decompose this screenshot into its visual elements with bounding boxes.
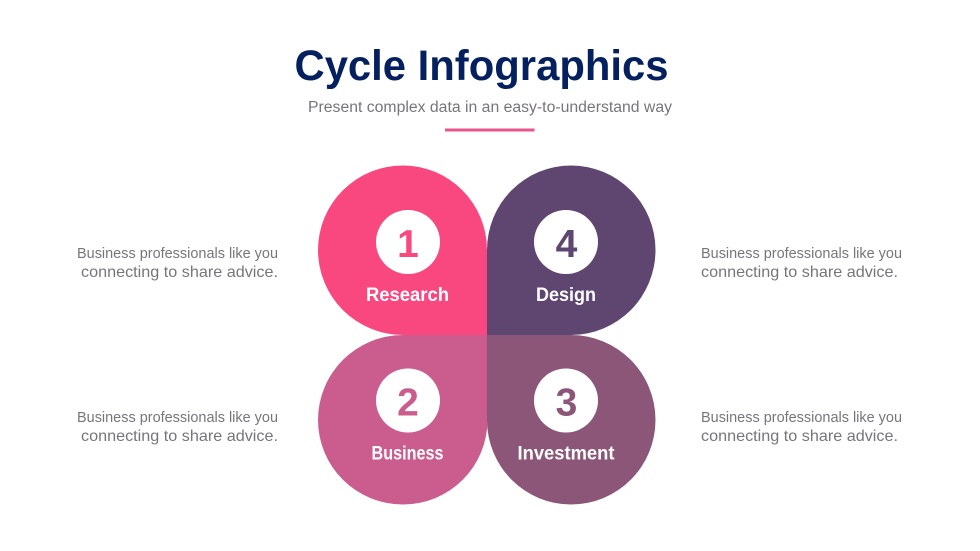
text block: bottom left: Business professionals like you bbox=[77, 409, 278, 426]
label investment: Investment bbox=[518, 444, 615, 464]
label design: Design bbox=[536, 285, 596, 306]
text block: bottom right: connecting to share advice. bbox=[701, 428, 898, 445]
badge 2 bbox=[376, 368, 440, 432]
label business: Business bbox=[372, 444, 444, 464]
text block: bottom left bbox=[77, 409, 278, 445]
text block: bottom left: connecting to share advice. bbox=[81, 428, 278, 445]
badge 3 bbox=[534, 368, 598, 432]
petal 2 bbox=[318, 335, 488, 504]
petal 1 bbox=[318, 166, 487, 335]
number 4: 4 bbox=[556, 223, 578, 266]
text block: bottom right bbox=[701, 409, 902, 445]
petal 4 bbox=[487, 166, 656, 335]
label research: Research bbox=[366, 285, 449, 306]
text block: top right bbox=[701, 245, 902, 281]
panel: step 2 business bbox=[318, 335, 488, 504]
badge 1 bbox=[376, 210, 440, 274]
petal 3 bbox=[487, 335, 656, 504]
badge 4 bbox=[534, 210, 598, 274]
panel: step 4 design bbox=[487, 166, 656, 335]
text block: top left: connecting to share advice. bbox=[81, 264, 278, 281]
title underline bbox=[445, 128, 534, 132]
number 3: 3 bbox=[556, 382, 577, 424]
text block: top right: Business professionals like you bbox=[701, 245, 902, 262]
text block: top left: Business professionals like you bbox=[77, 245, 278, 262]
subtitle: Present complex data in an easy-to-understand way bbox=[308, 99, 672, 116]
panel: step 1 research bbox=[318, 166, 487, 335]
text block: bottom right: Business professionals like you bbox=[701, 409, 902, 426]
number 2: 2 bbox=[397, 382, 419, 424]
text block: top left bbox=[77, 245, 278, 281]
panel: step 3 investment bbox=[487, 335, 656, 504]
number 1: 1 bbox=[397, 223, 419, 266]
text block: top right: connecting to share advice. bbox=[701, 264, 898, 281]
title: Cycle Infographics bbox=[294, 42, 668, 90]
